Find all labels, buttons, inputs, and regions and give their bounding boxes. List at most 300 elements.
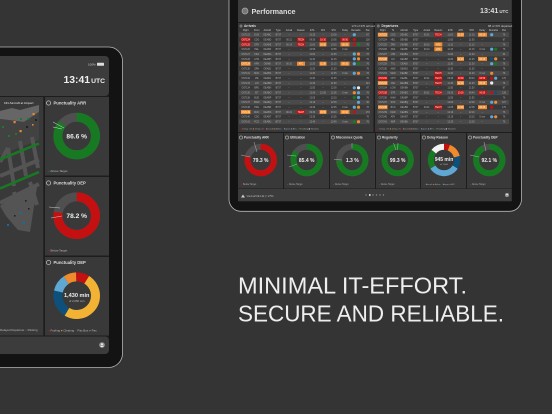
arrivals table: 09:30 <box>309 112 316 114</box>
departures table: OS7234 <box>378 88 388 90</box>
arrivals table: 12:40 <box>309 122 316 124</box>
arrivals table: B737 <box>276 97 282 99</box>
departures table: OEABL <box>400 77 409 80</box>
departures table: OEABO <box>400 92 408 95</box>
arrivals table: 76 <box>366 44 370 46</box>
remark dots <box>353 33 360 123</box>
departures table: 107 <box>502 102 507 104</box>
departures table: 170 <box>502 107 507 109</box>
arrivals table: OEABH <box>263 58 272 61</box>
arrivals table: OEABR <box>263 106 272 109</box>
departures table: B737 <box>413 83 419 85</box>
departures table: HAM <box>390 96 396 99</box>
departures table: OS7223 <box>378 35 388 37</box>
arrivals table: 76 <box>366 59 370 61</box>
departures table: 0 min <box>479 117 486 119</box>
arrivals table: 11:05 <box>331 54 337 56</box>
arrivals table: 11:45 <box>331 78 337 80</box>
arrivals table: Pax <box>366 30 371 32</box>
bottom bar <box>238 189 512 201</box>
arrivals table: OEABK <box>263 72 272 75</box>
arrivals table: 144 <box>366 83 370 85</box>
departures table: – <box>460 73 462 75</box>
departures table: 11:15 <box>469 49 475 51</box>
departures table: OEABT <box>400 116 408 119</box>
departures table: 0 min <box>479 102 486 104</box>
arrivals table: HEL <box>254 49 260 51</box>
arrivals table: – <box>288 122 290 124</box>
arrivals table: B737 <box>276 117 282 119</box>
departures table: – <box>438 39 440 41</box>
arrivals table: OEABG <box>263 53 272 56</box>
departures table: 87 <box>503 88 506 90</box>
departures table: – <box>460 49 462 51</box>
panel title: Utilization <box>290 136 305 140</box>
departures table: Aircraft <box>400 29 408 32</box>
callout lines <box>49 207 62 218</box>
arrivals table: OEABS <box>263 111 272 114</box>
departures table: Flight <box>380 29 386 32</box>
arrivals table: Delay <box>342 30 349 32</box>
arrivals table: ORY <box>254 44 260 46</box>
arrivals table: – <box>322 102 324 104</box>
departures table: – <box>438 54 440 56</box>
arrivals table: 00:21 <box>286 39 293 41</box>
apron <box>0 112 39 155</box>
arrivals table: Remarks <box>351 29 361 32</box>
departures table: – <box>438 97 440 99</box>
arrivals table: IST <box>255 93 259 95</box>
arrivals table: B737 <box>276 59 282 61</box>
departures table: OEABJ <box>400 67 408 70</box>
arrivals table: OEABF <box>263 48 272 51</box>
legend: ● Above Target <box>333 183 349 186</box>
arrivals table: 76 <box>366 49 370 51</box>
arrivals table: – <box>300 68 302 70</box>
arrivals table: 0 min <box>342 49 349 51</box>
arrivals table: 11:20 <box>310 64 316 66</box>
donut value: 85.4 % <box>299 158 315 164</box>
arrivals table: ATA <box>321 29 326 32</box>
departures table: – <box>482 122 484 124</box>
departures table: Type <box>413 30 419 32</box>
arrivals table: B737 <box>276 44 282 46</box>
arrivals table: 11:30 <box>310 73 316 75</box>
arrivals table: – <box>344 83 346 85</box>
page dots <box>365 194 384 196</box>
departures table: 11:35 <box>448 68 454 70</box>
arrivals table: OEABQ <box>263 101 272 104</box>
arrivals table: – <box>288 93 290 95</box>
arrivals table: OEABI <box>264 63 271 66</box>
departures table: OEABP <box>400 96 408 99</box>
departures table: 11:55 <box>469 97 475 99</box>
arrivals table: – <box>288 54 290 56</box>
legend: ● Above Target <box>287 183 303 186</box>
arrivals table: MUC <box>254 112 260 114</box>
panel title: Punctuality ARR <box>244 136 270 140</box>
departures table: 12:05 <box>469 107 475 109</box>
donut chart <box>294 147 320 173</box>
donut chart <box>431 147 457 173</box>
legend: ● Aircraft ● Airline ● Airport ● ATC <box>424 183 456 186</box>
departures table: 09:40 <box>469 93 475 95</box>
departures table: LGW <box>390 88 396 90</box>
departures table: – <box>460 68 462 70</box>
panel title: Departures <box>382 24 399 28</box>
departures table: OS7227 <box>378 54 388 56</box>
departures table: TXL <box>391 64 396 66</box>
donut value: 86.6 % <box>66 134 87 140</box>
departures table: OEABG <box>400 53 408 56</box>
arrivals table: OEABD <box>263 38 272 41</box>
departures table: – <box>438 117 440 119</box>
tablet screen <box>0 56 109 354</box>
departures table: 12:00 <box>458 83 464 85</box>
departures table: 00:15 <box>479 59 486 61</box>
terrain <box>0 105 39 122</box>
arrivals table: B737 <box>276 68 282 70</box>
panel: punctuality dep <box>467 133 512 188</box>
departures table: – <box>482 97 484 99</box>
panel: misconnex <box>330 133 375 188</box>
departures table: Remarks <box>489 29 499 32</box>
departures table <box>378 29 507 124</box>
tagline line 1: MINIMAL IT-EFFORT. <box>238 272 467 298</box>
tablet screen <box>238 0 512 201</box>
arrivals table: Aircraft <box>264 29 271 32</box>
arrivals table: – <box>288 117 290 119</box>
arrivals table: 12:05 <box>309 97 316 99</box>
donut chart <box>58 197 96 234</box>
departures table: ATD <box>458 29 463 32</box>
arrivals table: MUC <box>254 73 260 75</box>
arrivals table: 11:15 <box>331 64 337 66</box>
departures table: 12:15 <box>447 117 454 119</box>
arrivals table: OEABM <box>263 82 272 85</box>
arrivals table: 00:21 <box>286 112 293 114</box>
table legend: ■ Delay >15 ■ Delay >5 ■ Aircraft ■ Airline ■ Airport ■ ATC ■ Handling ■ Weather <box>240 128 319 131</box>
departures table: OEABU <box>400 121 408 124</box>
departures table: 09:30 <box>447 93 454 95</box>
departures table: – <box>426 59 428 61</box>
arrivals table: OS7132 <box>241 78 251 80</box>
arrivals table: 96 <box>366 102 370 104</box>
arrivals table: B737 <box>276 49 282 51</box>
arrivals table: – <box>344 59 346 61</box>
departures table: 00:50 <box>479 78 486 80</box>
departures table: 11:55 <box>448 97 454 99</box>
arrivals table: B737 <box>276 83 282 85</box>
departures table: OS7233 <box>378 83 388 85</box>
departures table: 11:20 <box>448 54 454 56</box>
departures table: – <box>438 122 440 124</box>
arrivals table: – <box>322 122 324 124</box>
departures table: 11:15 <box>448 49 454 51</box>
departures table: – <box>482 39 484 41</box>
tablet frame <box>229 0 522 211</box>
panel icon <box>46 181 51 185</box>
arrivals table: – <box>300 102 302 104</box>
arrivals table: – <box>288 83 290 85</box>
arrivals table: – <box>344 54 346 56</box>
user icon <box>505 193 509 197</box>
donut sub value: of 1,500 <box>440 164 449 166</box>
departures table: – <box>482 112 484 114</box>
taxiways <box>0 137 39 208</box>
tagline <box>238 272 504 327</box>
map legend: Delayed Departure ● Parking <box>0 328 38 332</box>
arrivals table: FCO <box>254 122 259 124</box>
departures table: STD <box>469 30 474 32</box>
departures table: – <box>460 88 462 90</box>
departures table: OEABM <box>400 82 408 85</box>
departures table: OS7241 <box>378 122 388 124</box>
departures table: – <box>460 112 462 114</box>
departures table: 11:50 <box>448 88 454 90</box>
departures table: 11:10 <box>448 44 454 46</box>
panel icon <box>377 136 381 139</box>
arrivals table: B737 <box>276 107 282 109</box>
tablet frame <box>0 47 122 368</box>
arrivals table: 76 <box>366 107 370 109</box>
departures table: CDG <box>390 35 396 37</box>
panel: regularity <box>376 133 420 188</box>
arrivals table: OS7128 <box>241 59 251 61</box>
departures table: 10:30 <box>458 93 464 95</box>
departures table: LHR <box>391 54 396 56</box>
departures table: BCN <box>391 107 396 109</box>
arrivals table: OEABC <box>263 34 272 37</box>
departures table: 11:40 <box>469 73 475 75</box>
arrivals table: B737 <box>276 64 282 66</box>
arrivals table: 0 min <box>342 73 349 75</box>
arrivals table: – <box>344 68 346 70</box>
departures table: 11:35 <box>469 68 475 70</box>
departures table: OEABK <box>400 72 408 75</box>
arrivals table: – <box>300 107 302 109</box>
panel counter: 88 of 370 departed <box>488 24 513 28</box>
departures table: B737 <box>413 88 419 90</box>
arrivals table: – <box>300 78 302 80</box>
arrivals table: – <box>322 107 324 109</box>
departures table: OS7228 <box>378 59 388 61</box>
arrivals table: 12:15 <box>331 102 337 104</box>
departures table: 11:10 <box>469 44 475 46</box>
departures table: – <box>482 54 484 56</box>
departures table: OEABF <box>400 48 408 51</box>
departures table: OS7237 <box>378 102 388 104</box>
departures table: 12:05 <box>447 107 454 109</box>
departures table: OEABQ <box>400 101 408 104</box>
departures table: – <box>482 64 484 66</box>
arrivals table: 00:14 <box>286 44 293 46</box>
departures table: ATC <box>436 43 441 46</box>
arrivals table: OEABT <box>263 116 272 119</box>
departures table: – <box>460 64 462 66</box>
departures table: TECH <box>435 83 442 85</box>
departures table: OEABN <box>400 87 408 90</box>
departures table: B737 <box>413 117 419 119</box>
arrivals table: – <box>300 59 302 61</box>
arrivals table: 11:55 <box>310 88 316 90</box>
arrivals table: 11:00 <box>310 44 316 46</box>
departures table: KBP <box>391 122 396 124</box>
donut value: 92.1 % <box>482 158 498 164</box>
arrivals table: 10:15 <box>331 44 337 46</box>
arrivals table: 76 <box>366 97 370 99</box>
arrivals table: 00:50 <box>342 39 349 41</box>
arrivals table: 00:10 <box>342 112 349 114</box>
departures table: 12:00 <box>469 102 475 104</box>
arrivals table: B737 <box>276 35 282 37</box>
departures table: – <box>426 54 428 56</box>
departures table: B737 <box>413 107 419 109</box>
departures table: 11:45 <box>469 83 475 85</box>
aircraft markers <box>2 113 37 226</box>
arrivals table: B737 <box>276 78 282 80</box>
departures table: 76 <box>503 122 506 124</box>
arrivals table: 12:00 <box>309 93 316 95</box>
clock: 13:41UTC <box>64 75 105 86</box>
runway 2 <box>0 172 39 188</box>
highlights <box>241 38 350 114</box>
departures table: – <box>482 44 484 46</box>
departures table: 170 <box>502 78 507 80</box>
departures table: Actual <box>424 29 430 32</box>
arrivals table: – <box>344 78 346 80</box>
departures table: OEABR <box>400 106 408 109</box>
departures table: 11:30 <box>448 64 454 66</box>
panel icon <box>468 136 472 139</box>
arrivals table: OEABE <box>263 43 272 46</box>
departures table: – <box>438 59 440 61</box>
arrivals table: B737 <box>276 73 282 75</box>
arrivals table: 128 <box>366 39 370 41</box>
arrivals table: – <box>300 54 302 56</box>
arrivals table: OS7136 <box>241 97 251 99</box>
departures table: 09:30 <box>447 78 454 80</box>
arrivals table: 76 <box>366 64 370 66</box>
arrivals table: – <box>300 93 302 95</box>
status bar: 100% <box>88 62 96 66</box>
panel icon <box>377 24 380 28</box>
panel title: Misconnex Quota <box>336 136 363 140</box>
arrivals table: – <box>344 117 346 119</box>
departures table: – <box>426 64 428 66</box>
panel icon <box>46 101 51 105</box>
arrivals table: B737 <box>276 54 282 56</box>
departures table: 00:10 <box>424 44 430 46</box>
clock: 13:41UTC <box>480 6 509 15</box>
panel: punctuality dep <box>45 177 109 256</box>
departures table: Reason <box>434 30 443 32</box>
departures table: 0 min <box>479 49 486 51</box>
home icon <box>241 194 245 198</box>
arrivals table: – <box>322 88 324 90</box>
departures table: B737 <box>413 73 419 75</box>
arrivals table: 76 <box>366 54 370 56</box>
donut chart <box>58 117 95 155</box>
departures table: 11:40 <box>458 59 464 61</box>
arrivals table: OS7127 <box>241 54 251 56</box>
arrivals table: – <box>288 97 290 99</box>
departures table: 00:21 <box>424 78 430 80</box>
departures table: B737 <box>413 122 419 124</box>
user icon <box>99 342 105 348</box>
departures table: SOF <box>391 102 396 104</box>
departures table: – <box>426 97 428 99</box>
arrivals table: 10:30 <box>320 44 327 46</box>
panel counter: 170 of 370 arrived <box>352 24 375 28</box>
departures table: LIS <box>391 59 395 61</box>
arrivals table: 76 <box>366 122 370 124</box>
departures table: – <box>438 112 440 114</box>
arrivals table: – <box>300 117 302 119</box>
departures table: 00:21 <box>424 107 430 109</box>
panel: utilisation <box>284 133 329 188</box>
panel: departures <box>375 23 513 132</box>
departures table: 87 <box>503 39 506 41</box>
arrivals table: 76 <box>366 93 370 95</box>
legend: ● Below Target <box>48 248 67 252</box>
departures table: 76 <box>503 83 506 85</box>
callout lines <box>53 122 64 129</box>
arrivals table: B737 <box>276 122 282 124</box>
arrivals table: LHR <box>254 59 259 61</box>
arrivals table: OEABJ <box>264 67 271 70</box>
donut value: 78.2 % <box>66 213 87 220</box>
pressure label: ⚲ 1754 <box>265 194 274 198</box>
panel icon <box>331 136 335 139</box>
departures table: Pax <box>502 30 507 32</box>
arrivals table: BRU <box>254 88 259 90</box>
departures table: TECH <box>435 78 442 80</box>
highlights <box>378 33 487 109</box>
arrivals table: 76 <box>366 68 370 70</box>
panel icon <box>422 136 426 139</box>
arrivals table: 10:25 <box>309 35 316 37</box>
departures table: – <box>426 68 428 70</box>
departures table: B737 <box>413 49 419 51</box>
arrivals table: 00:15 <box>342 64 349 66</box>
right tablet <box>229 0 522 211</box>
arrivals table: – <box>344 35 346 37</box>
arrivals table: 12:30 <box>309 117 316 119</box>
arrivals table: TECH <box>298 112 304 114</box>
departures table: Delay <box>479 30 486 32</box>
arrivals table: B737 <box>276 39 282 41</box>
arrivals table: – <box>322 59 324 61</box>
departures table: OSL <box>391 83 396 85</box>
departures table: OS7230 <box>378 68 388 70</box>
callout lines <box>287 155 297 167</box>
arrivals table: – <box>288 73 290 75</box>
departures table: – <box>482 68 484 70</box>
departures table: OEABE <box>400 43 408 46</box>
arrivals table: 12:00 <box>331 88 337 90</box>
departures table: B737 <box>413 97 419 99</box>
stripes <box>377 32 509 124</box>
arrivals table: 00:10 <box>286 64 293 66</box>
page title: Performance <box>252 7 295 16</box>
departures table: TECH <box>435 35 442 37</box>
arrivals table: – <box>288 35 290 37</box>
donut value: 99.3 % <box>390 158 406 164</box>
arrivals table: ATC <box>299 63 304 66</box>
panel: arrivals <box>238 23 375 132</box>
arrivals table: 76 <box>366 117 370 119</box>
